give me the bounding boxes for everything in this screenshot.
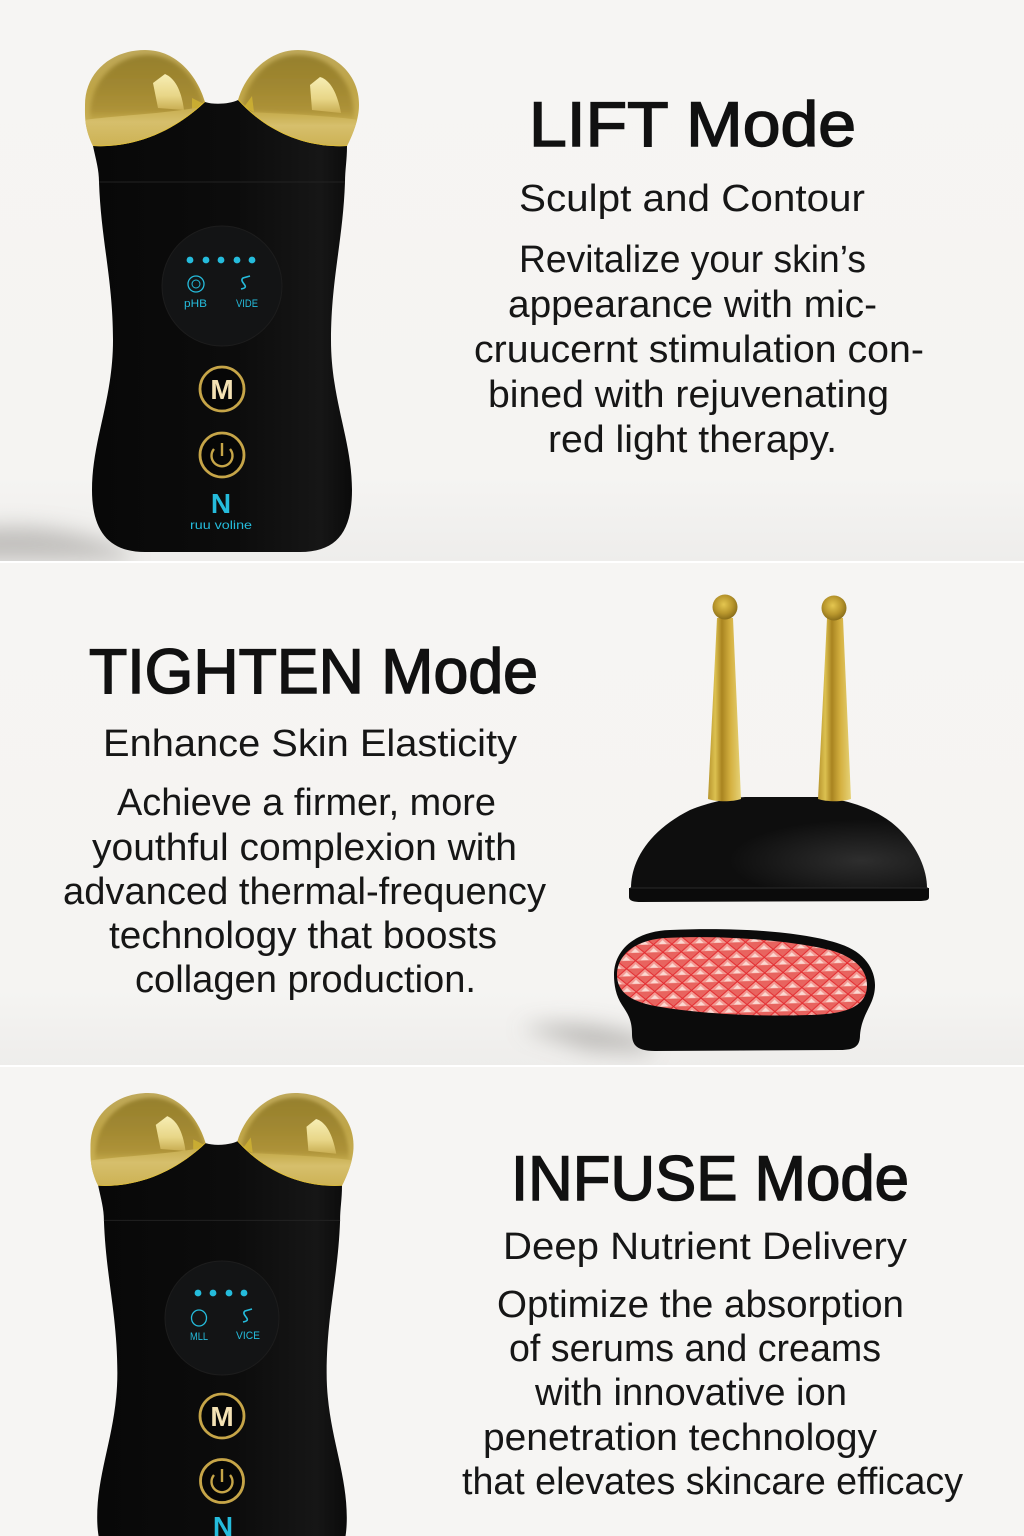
subheading: lift: Sculpt and Contour [519,178,865,220]
prong left [708,594,741,801]
body text: infuse: Optimize the absorption [497,1284,904,1326]
panel: lift mode [0,50,922,561]
mode button: M [210,374,234,405]
display screen [162,226,282,346]
subheading: infuse: Deep Nutrient Delivery [503,1226,907,1268]
body text: infuse: that elevates skincare efficacy [462,1461,963,1503]
display screen: VIDE [236,298,258,310]
mode button [200,1394,244,1438]
floor shadow: red pad [520,1024,650,1052]
body text: tighten [63,782,546,1001]
body text: lift: red light therapy. [548,419,837,461]
body text: tighten: youthful complexion with [92,827,517,869]
brand logo: ruu voline [190,518,252,532]
body text: lift [474,239,924,461]
heading: tighten: TIGHTEN Mode [89,637,538,707]
body text: infuse: penetration technology [483,1417,877,1459]
body text: tighten: advanced thermal-frequency [63,871,546,913]
body text: infuse: of serums and creams [509,1328,881,1370]
power button [200,433,244,477]
panel: infuse mode [0,1065,1024,1536]
mode button [200,367,244,411]
body text: infuse [462,1284,963,1503]
body text: lift: bined with rejuvenating [488,374,889,416]
gold ball right [238,50,359,146]
quilted red surface [617,937,867,1016]
panel: tighten mode [0,561,1024,1066]
mode button: M [210,1401,234,1432]
power button [200,1460,244,1502]
body text: infuse: with innovative ion [534,1372,847,1414]
gold ball left [90,1093,206,1186]
body text: lift: Revitalize your skin’s [519,239,866,281]
display screen [165,1261,279,1375]
subheading: tighten: Enhance Skin Elasticity [103,723,517,765]
heading: lift: LIFT Mode [529,90,856,160]
gold ball left [84,50,205,146]
brand logo [190,488,252,532]
prong right [818,596,851,801]
body text: tighten: collagen production. [135,959,476,1001]
floor shadow: lift device [0,527,130,560]
heading: infuse: INFUSE Mode [511,1144,909,1214]
body text: lift: cruucernt stimulation con- [474,329,924,371]
gold ball right [238,1093,354,1186]
display screen: MLL [190,1331,208,1343]
display screen: pHB [184,298,207,310]
display screen: VICE [236,1330,260,1342]
device: infuse [86,1091,359,1536]
body text: lift: appearance with mic- [508,284,877,326]
body text: tighten: Achieve a firmer, more [117,782,496,824]
attachment: dual-prong head [629,594,929,902]
attachment: red light pad [614,929,875,1051]
device: lift [80,48,365,552]
body text: tighten: technology that boosts [109,915,497,957]
brand logo: N [211,488,231,519]
